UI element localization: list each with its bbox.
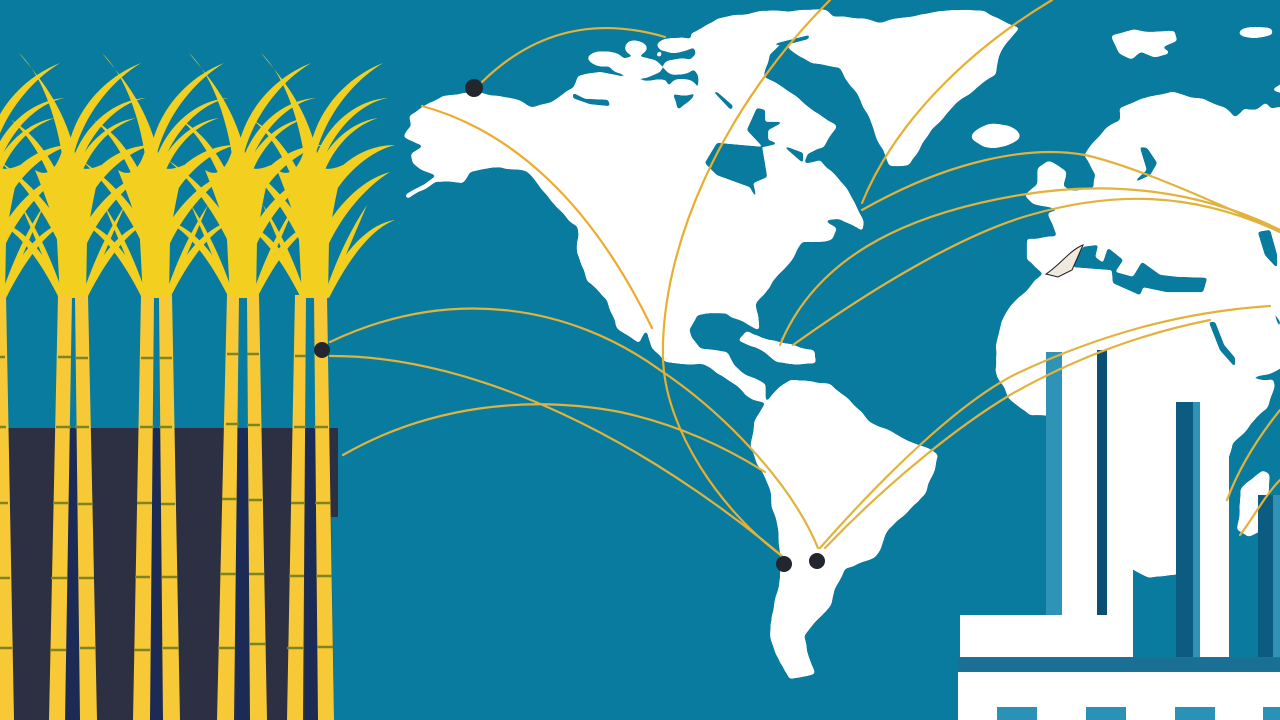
sea: Arctic inlet <box>573 93 610 106</box>
factory <box>958 350 1280 720</box>
factory: chimney highlight <box>1193 402 1200 657</box>
strait of Gibraltar <box>1046 245 1083 277</box>
factory: right white tower <box>1200 402 1229 657</box>
sea: Hudson Strait <box>747 108 803 163</box>
factory: dark slit <box>1097 350 1107 615</box>
factory: base block <box>960 615 1133 657</box>
cane crowns <box>0 53 395 298</box>
factory: roof band <box>958 658 1280 671</box>
map: Caribbean islands <box>737 331 817 365</box>
factory: far right dark block <box>1258 495 1273 657</box>
sea: Persian Gulf <box>1270 305 1280 328</box>
sea: Baltic <box>1133 147 1157 183</box>
sea: Hudson Bay <box>705 143 767 200</box>
factory: white tower <box>1062 352 1133 615</box>
factory: windows <box>997 707 1280 720</box>
dark gaps between paired stems <box>66 428 319 720</box>
map: North America <box>405 10 865 402</box>
map: Arctic islands <box>587 37 696 97</box>
world map <box>405 10 1280 678</box>
route endpoint dots <box>314 79 825 572</box>
cane stems <box>0 295 334 720</box>
map: Siberian coast <box>1270 70 1280 102</box>
sea: northern channel <box>713 91 733 110</box>
map: Eurasia and Africa <box>995 90 1280 577</box>
trade route arcs <box>330 0 1280 556</box>
sea: Mediterranean <box>1073 245 1207 295</box>
map: Svalbard <box>1110 31 1178 60</box>
soil block <box>7 428 338 720</box>
cane nodes <box>0 354 333 650</box>
factory: light blue chimney <box>1046 352 1062 615</box>
map: Iceland <box>972 124 1020 148</box>
map: South America <box>750 380 938 678</box>
factory: far right highlight <box>1273 495 1280 657</box>
map: northern island <box>1238 27 1272 39</box>
inland seas <box>573 35 1280 367</box>
sugarcane field <box>0 53 395 720</box>
sea: Caspian <box>1258 230 1277 268</box>
map: Madagascar <box>1237 470 1269 537</box>
sea: Red Sea <box>1209 322 1235 367</box>
map: Greenland <box>787 10 1020 165</box>
factory: dark chimney <box>1176 402 1193 657</box>
factory: lower wall <box>958 672 1280 720</box>
sea: Baffin inlet <box>770 35 810 45</box>
